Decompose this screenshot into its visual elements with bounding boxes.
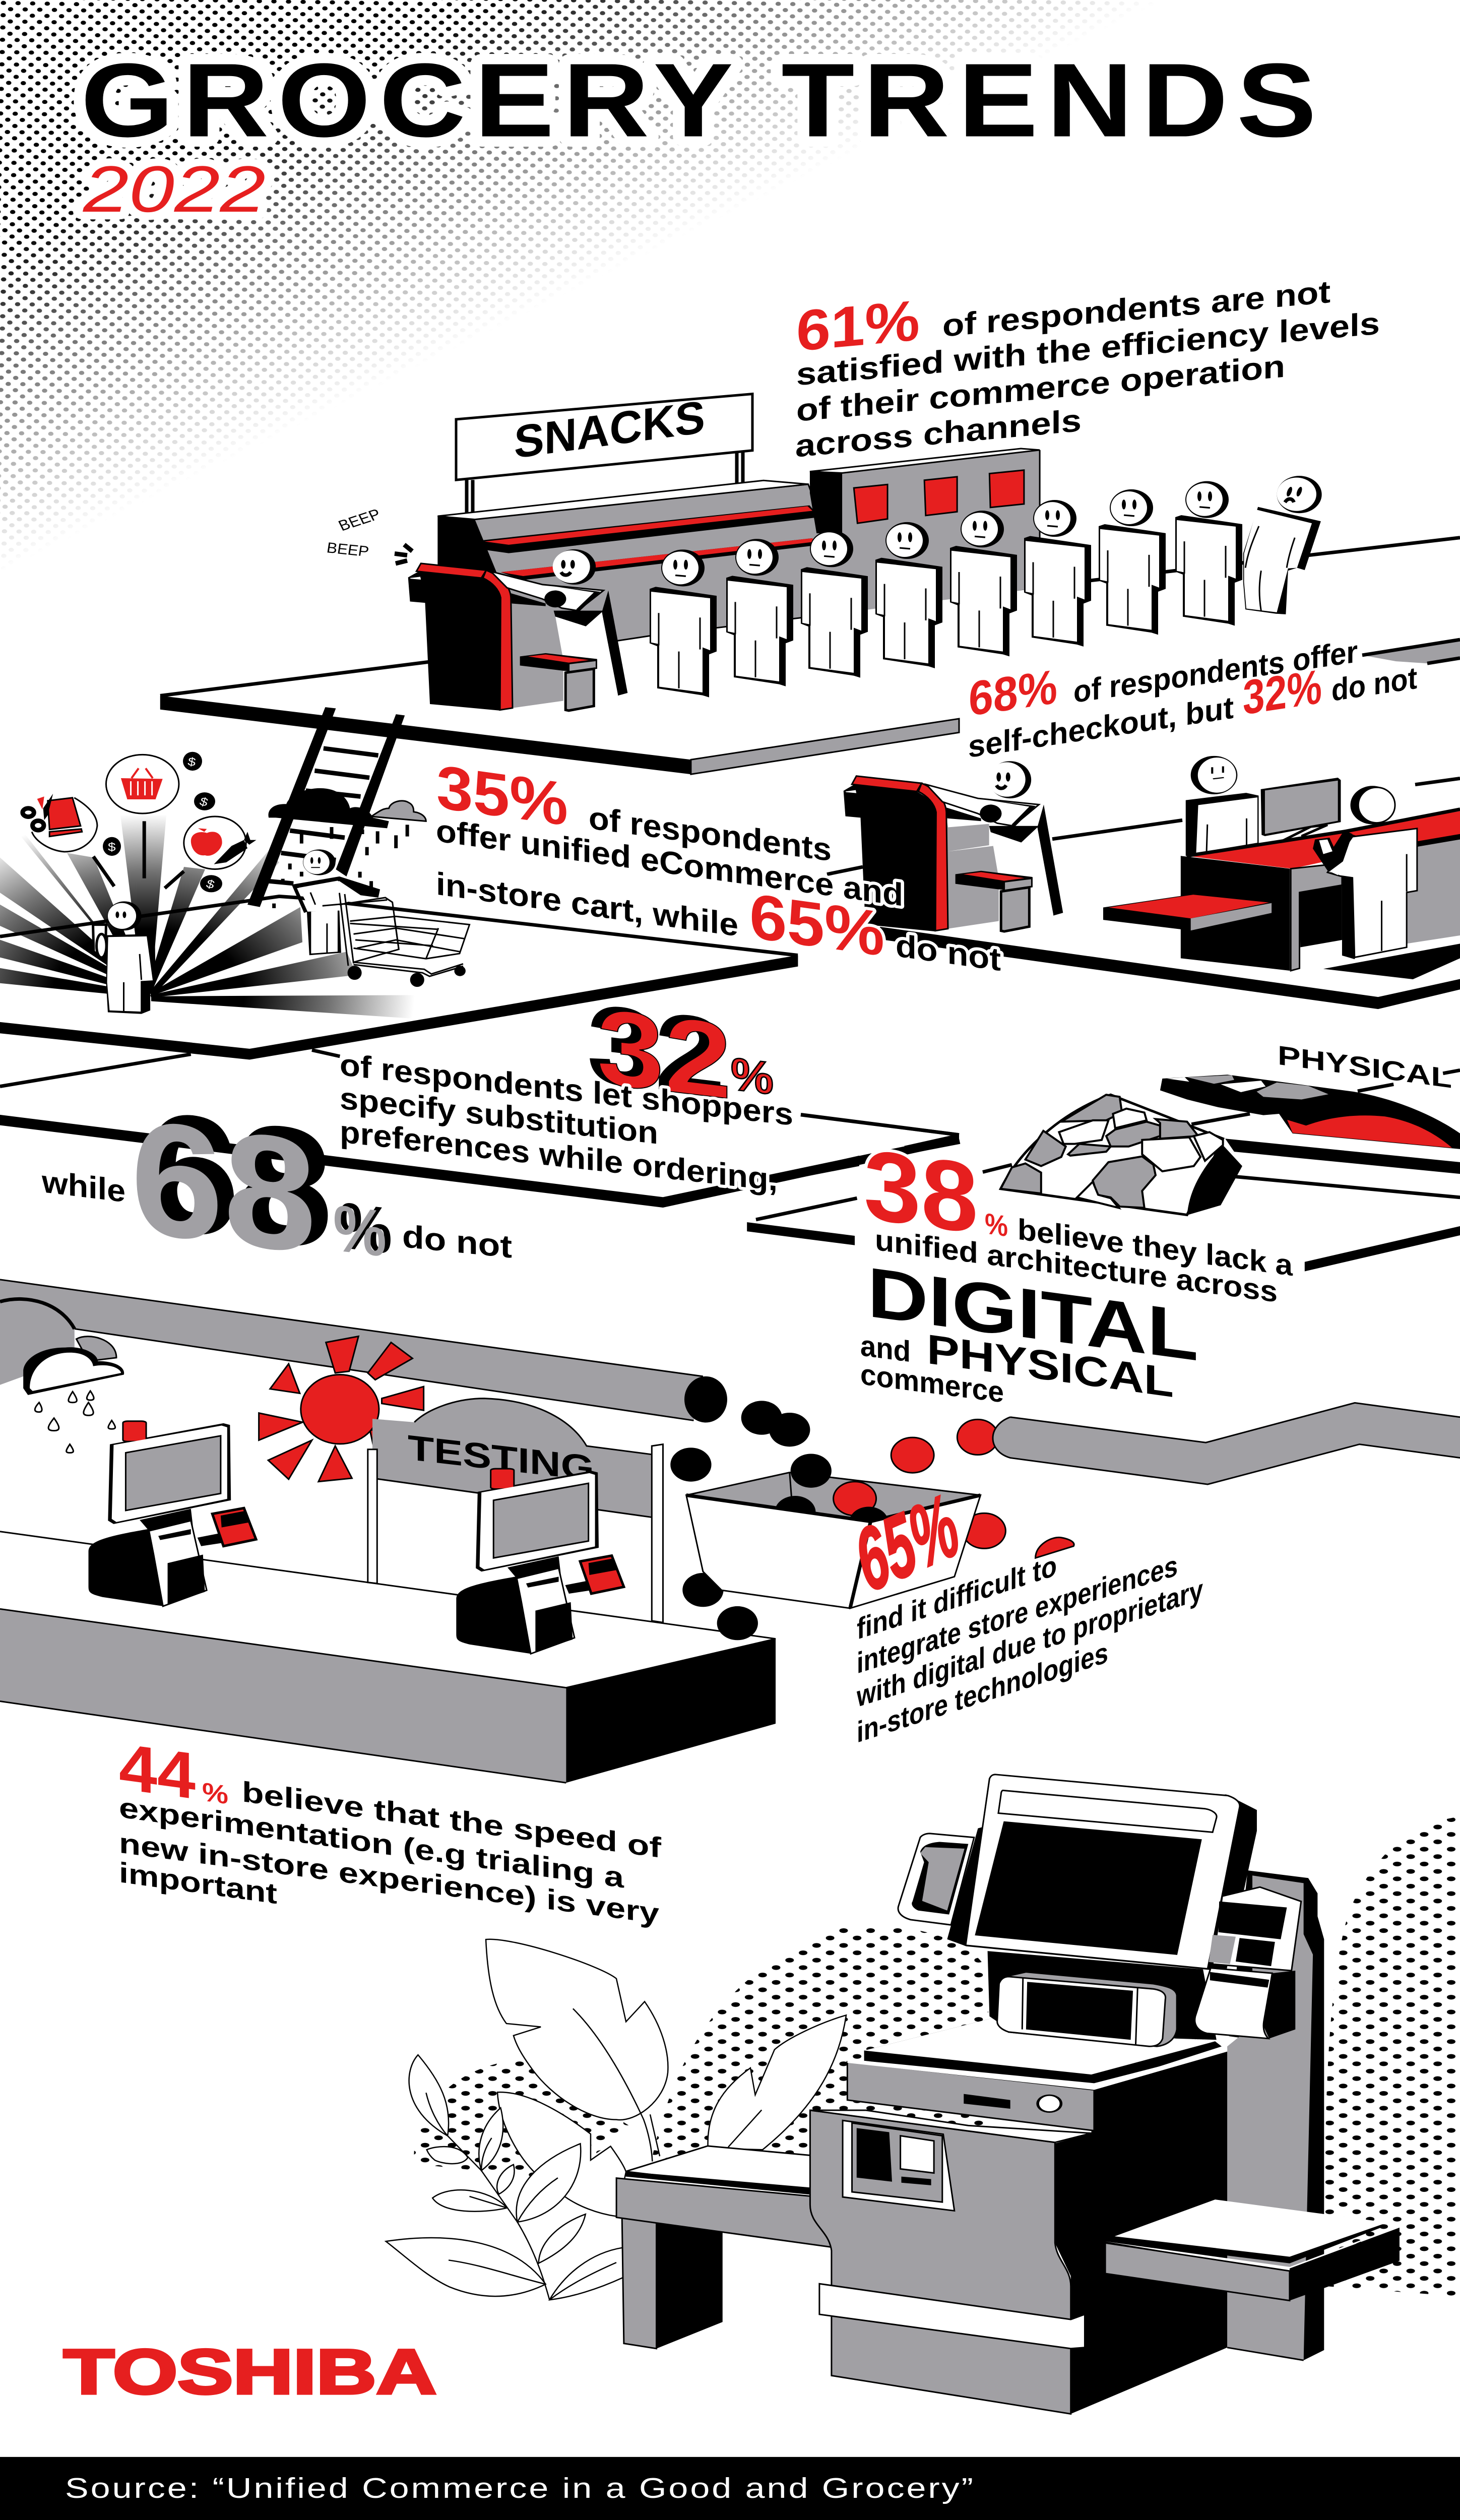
32 big number: % xyxy=(731,1048,774,1104)
stat: 35% unified cart: offer unified eCommerce and xyxy=(436,812,903,913)
stat: 44% experimentation xyxy=(119,1730,662,1930)
stat: 38% digital and physical: commerce xyxy=(860,1357,1004,1409)
halftone blobs behind plants xyxy=(414,1817,1460,2297)
stat: 32% substitution: of respondents let shoppers xyxy=(340,1047,793,1132)
starburst rays xyxy=(0,811,417,1019)
stat: 35% unified cart: 35% xyxy=(436,752,568,839)
stat: 32% substitution xyxy=(340,982,793,1198)
bucket and balls xyxy=(670,1401,1074,1640)
stat: 61%: of respondents are not xyxy=(942,274,1330,343)
floor of panel xyxy=(0,955,798,1059)
stat: while 68% do not: % xyxy=(339,1188,392,1268)
cloud and rain xyxy=(268,788,426,908)
footer: source xyxy=(0,2457,1460,2520)
stat: 38% digital and physical: believe they lack a xyxy=(1018,1212,1293,1282)
customer xyxy=(1313,786,1417,959)
rear tower xyxy=(1227,1870,1324,2360)
icon: dollar coins: $ xyxy=(108,841,116,854)
stat: while 68% do not: do not xyxy=(402,1218,512,1265)
physical bridge piece xyxy=(1160,1070,1460,1149)
panel: testing lab xyxy=(0,1280,776,1783)
label: testing: TESTING xyxy=(408,1428,594,1488)
testing arch xyxy=(368,1399,663,1622)
lower cabinet xyxy=(810,2019,1227,2414)
cashier xyxy=(1186,756,1259,856)
person with cart xyxy=(292,849,470,987)
right table xyxy=(1105,2199,1400,2301)
people queue xyxy=(650,476,1322,698)
68 big number: 68 xyxy=(145,1079,331,1281)
stat: 61%: across channels xyxy=(795,402,1082,464)
panel: checkout floor xyxy=(827,779,1460,1009)
stat: while 68% do not xyxy=(41,1079,512,1288)
stat: 38% digital and physical: PHYSICAL xyxy=(927,1325,1174,1406)
stat: 61% xyxy=(795,274,1380,464)
stat: 44% experimentation: important xyxy=(119,1856,277,1910)
panel: architecture floor xyxy=(747,1070,1460,1271)
beep labels: BEEP xyxy=(326,539,370,560)
stat: 35% unified cart: 65% xyxy=(749,880,884,970)
beep labels: BEEP xyxy=(336,506,384,534)
digital pipe xyxy=(0,1280,727,1422)
stat: 44% experimentation: new in-store experience) is very xyxy=(119,1826,659,1930)
panel: upper store floor xyxy=(160,538,1460,774)
sign: snacks: SNACKS xyxy=(514,391,705,468)
shopper in burst xyxy=(93,901,156,1014)
icon: sun xyxy=(259,1336,424,1482)
icons: shopping bubbles xyxy=(23,754,257,888)
32 big number: 32 xyxy=(597,986,732,1122)
icon: rain cloud xyxy=(0,1299,124,1453)
stat: 32% substitution: preferences while ordering, xyxy=(340,1114,778,1198)
stat: 61%: of their commerce operation xyxy=(796,348,1285,428)
stat: 38% digital and physical: DIGITAL xyxy=(867,1252,1198,1376)
icon: basket xyxy=(106,754,179,813)
stat: 44% experimentation: believe that the speed of xyxy=(242,1776,662,1864)
left table xyxy=(616,2146,838,2349)
monitor xyxy=(1261,778,1341,836)
stat: 68% self-checkout: 68% xyxy=(969,659,1057,726)
bucket xyxy=(686,1454,981,1608)
small screen xyxy=(997,1972,1177,2046)
stat: 68% self-checkout: 32% xyxy=(1243,659,1322,725)
stat: 65% integration text: integrate store experiences xyxy=(857,1549,1178,1680)
icon: dollar coins: $ xyxy=(205,877,216,892)
big self-checkout machine xyxy=(616,1775,1400,2414)
bridge broken arch xyxy=(1001,1095,1242,1215)
handle xyxy=(898,1834,974,1925)
stat: 65% integration text: find it difficult to xyxy=(857,1549,1057,1646)
icon: book and scissors xyxy=(23,794,97,852)
stat: 38% digital and physical: % xyxy=(985,1207,1008,1243)
stat: 68% self-checkout: self-checkout, but xyxy=(968,690,1234,764)
stat: 38% digital and physical xyxy=(860,1128,1293,1409)
icon: dollar coins: $ xyxy=(187,755,197,769)
plants xyxy=(386,1939,846,2300)
stat: while 68% do not: while xyxy=(41,1164,125,1209)
stat: 68% self-checkout: of respondents offer xyxy=(1073,634,1358,710)
sign: snacks xyxy=(456,391,752,514)
label: physical: PHYSICAL xyxy=(1278,1040,1452,1094)
main screen xyxy=(947,1775,1257,1972)
logo: toshiba: TOSHIBA xyxy=(64,2337,436,2407)
stat: 38% digital and physical: and xyxy=(860,1329,911,1368)
year: 2022 xyxy=(83,152,266,226)
physical pipe xyxy=(993,1403,1460,1484)
68 big number: 68 xyxy=(131,1086,316,1288)
icon: dollar coins: $ xyxy=(198,795,210,809)
title: GROCERY TRENDS xyxy=(81,42,1316,159)
machine base xyxy=(616,1870,1400,2414)
panel: substitution floor xyxy=(0,1050,959,1208)
stat: 35% unified cart: in-store cart, while xyxy=(436,866,738,943)
icon: dollar coins xyxy=(103,752,222,892)
kiosks on platform xyxy=(89,1421,624,1654)
stat: 32% substitution: specify substitution xyxy=(340,1080,658,1151)
stat: 35% unified cart: do not xyxy=(896,927,1001,978)
stat: 61%: 61% xyxy=(796,288,920,363)
control panel xyxy=(843,2120,955,2211)
upper screen assembly xyxy=(898,1775,1301,2046)
stat: 44% experimentation: experimentation (e.g trialing a xyxy=(119,1791,624,1894)
beep labels xyxy=(326,506,412,563)
stat: 35% unified cart xyxy=(436,752,1001,978)
stat: 44% experimentation: % xyxy=(202,1777,228,1810)
self-checkout kiosk 2 xyxy=(844,761,1063,931)
shopping cart xyxy=(323,893,470,987)
32 big number: 32 xyxy=(589,982,724,1118)
stat: 44% experimentation: 44 xyxy=(119,1730,196,1813)
stat: 65% bucket: 65% xyxy=(845,1475,969,1611)
stat: 65% integration text: in-store technologies xyxy=(857,1635,1108,1749)
halftone background xyxy=(0,0,1136,557)
ladder xyxy=(247,707,405,907)
stat: 38% digital and physical: unified architecture across xyxy=(875,1223,1278,1308)
stat: 35% unified cart: of respondents xyxy=(589,800,832,868)
stat: 68% self-checkout xyxy=(968,634,1417,764)
stat: while 68% do not: % xyxy=(333,1191,387,1271)
shelving unit xyxy=(437,449,1040,658)
stat: 65% integration text: with digital due to proprietary xyxy=(856,1573,1203,1714)
payment unit xyxy=(1195,1887,1301,2039)
staffed checkout counter xyxy=(1103,756,1460,979)
stat: 61%: satisfied with the efficiency levels xyxy=(796,305,1380,392)
self-checkout kiosk xyxy=(408,549,627,711)
panel: starburst with shopper xyxy=(0,811,798,1059)
stat: 38% digital and physical: 38 xyxy=(864,1128,978,1254)
stat: 68% self-checkout: do not xyxy=(1331,660,1417,708)
footer: source: Source: “Unified Commerce in a Good and Grocery” xyxy=(65,2472,973,2504)
platform xyxy=(0,1532,776,1783)
icon: apple and carrot xyxy=(184,816,257,869)
